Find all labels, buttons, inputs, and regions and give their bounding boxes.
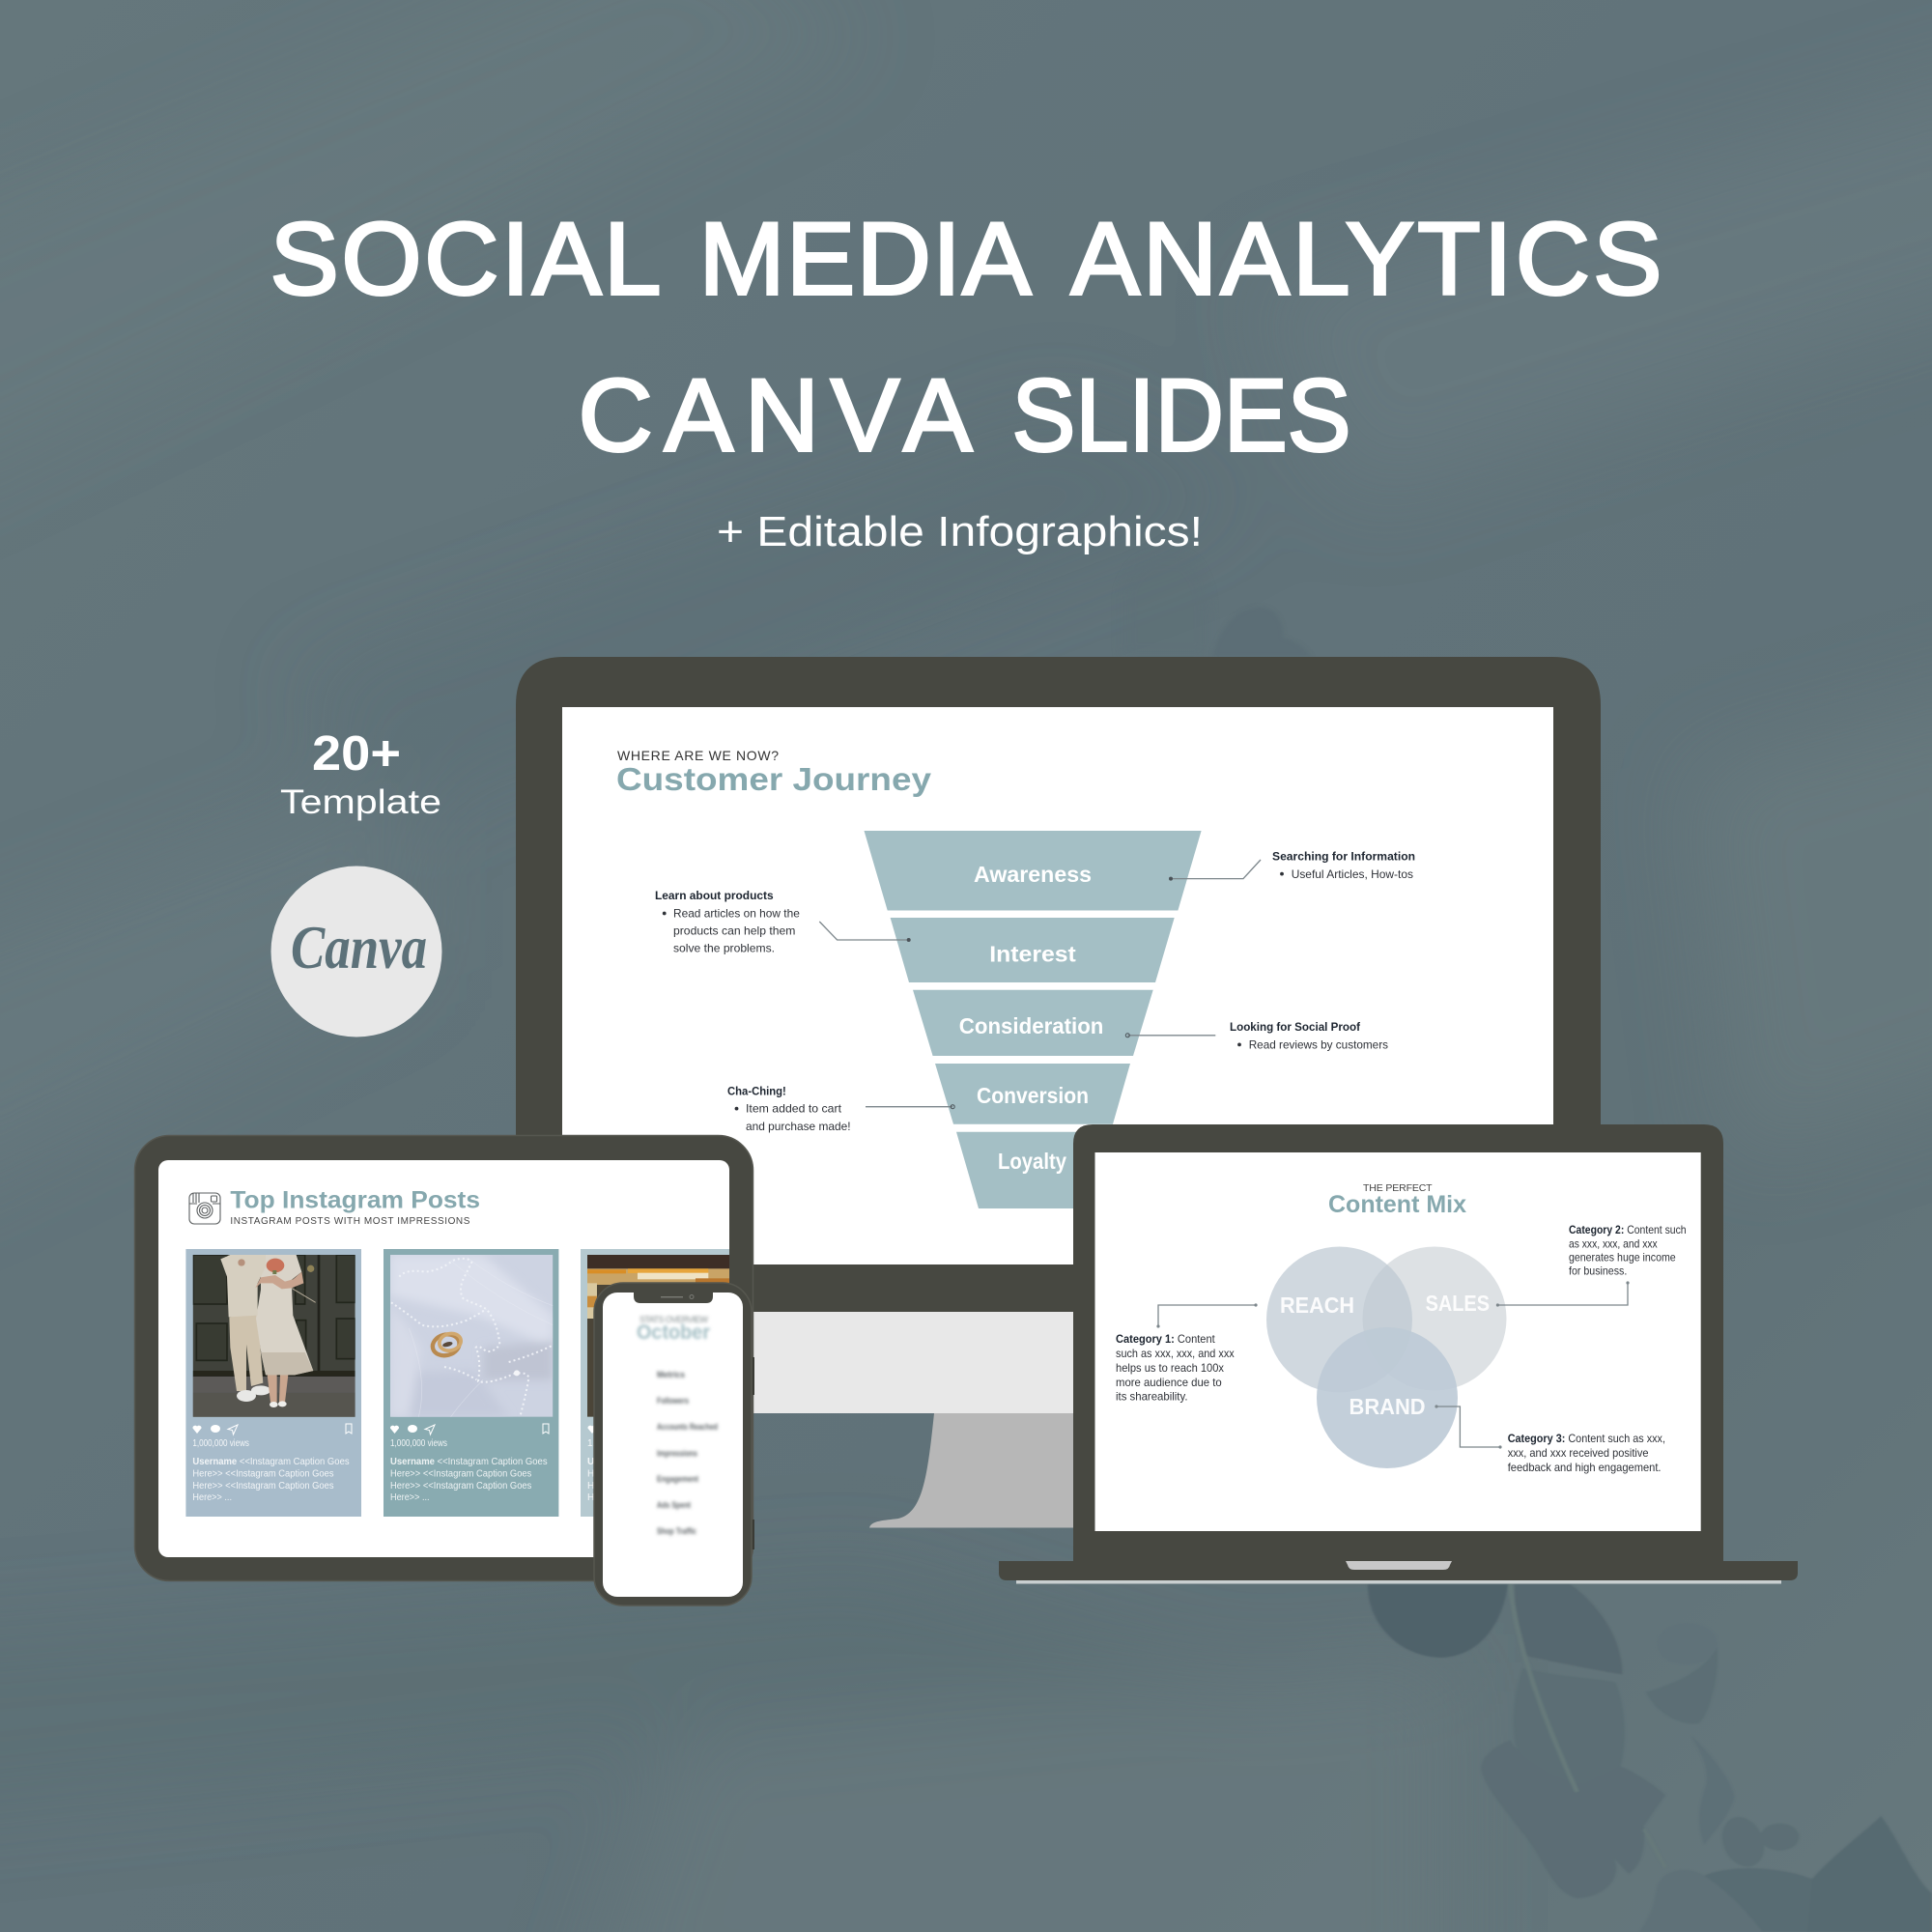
text: category 2: generates huge income bbox=[1569, 1251, 1676, 1264]
post icons bbox=[390, 1424, 549, 1435]
funnel: loyalty bbox=[956, 1132, 1109, 1208]
slide heading: customer journey bbox=[616, 748, 932, 797]
post caption: Username bbox=[587, 1457, 635, 1467]
venn labels: SALES bbox=[1426, 1291, 1490, 1316]
phone buttons bbox=[752, 1357, 754, 1549]
funnel: consideration: Consideration bbox=[959, 1013, 1103, 1038]
funnel: consideration bbox=[913, 990, 1153, 1056]
phone slide: october stats: STATS OVERVIEW bbox=[639, 1315, 709, 1324]
post caption: Here>> <<Instagram Caption Goes bbox=[390, 1468, 531, 1479]
text: category 1: helps us to reach 100x bbox=[1116, 1361, 1224, 1375]
text: category 3 bbox=[1508, 1432, 1665, 1474]
text: category 2: for business. bbox=[1569, 1264, 1627, 1278]
Canva badge bbox=[270, 866, 442, 1037]
text: category 2 bbox=[1569, 1223, 1687, 1278]
text: category 3: Category 3: Content such as xxx, bbox=[1508, 1432, 1665, 1445]
note: learn about products bbox=[655, 889, 911, 955]
title: ANALYTICS bbox=[1070, 201, 1662, 317]
funnel: awareness bbox=[864, 831, 1202, 910]
title: MEDIA bbox=[699, 201, 1032, 317]
leaf shadows bottom right bbox=[1368, 1584, 1932, 1932]
phone notch bbox=[634, 1292, 713, 1303]
text: category 1 bbox=[1116, 1332, 1235, 1403]
text: category 1: such as xxx, xxx, and xxx bbox=[1116, 1347, 1235, 1360]
tablet screen bbox=[158, 1160, 729, 1557]
monitor bbox=[516, 657, 1601, 1528]
connector: category 2 bbox=[1496, 1281, 1630, 1307]
note: learn about products: Learn about products bbox=[655, 889, 774, 902]
monitor screen bbox=[562, 707, 1553, 1264]
phone slide: october stats: Shop Traffic bbox=[657, 1526, 696, 1537]
post caption bbox=[390, 1457, 548, 1503]
connector: category 1 bbox=[1156, 1303, 1258, 1328]
circle: reach bbox=[1266, 1246, 1412, 1393]
photo: sunset bbox=[587, 1255, 730, 1417]
post caption: Here>> bbox=[587, 1468, 620, 1479]
post caption: 1,000,000 views bbox=[587, 1438, 657, 1449]
text: category 1: more audience due to bbox=[1116, 1376, 1222, 1389]
icon: instagram camera bbox=[189, 1193, 220, 1224]
post icons bbox=[192, 1424, 352, 1435]
post caption: Here>> ... bbox=[192, 1492, 232, 1503]
venn diagram bbox=[1266, 1246, 1507, 1468]
funnel: interest: Interest bbox=[989, 941, 1076, 966]
note: cha-ching: and purchase made! bbox=[746, 1120, 851, 1133]
funnel: conversion bbox=[935, 1064, 1130, 1124]
venn labels: BRAND bbox=[1349, 1394, 1426, 1419]
circle: sales bbox=[1362, 1246, 1507, 1391]
decorative leaf shadows above the monitor bbox=[1123, 557, 1312, 657]
phone slide: october stats: Accounts Reached bbox=[657, 1422, 718, 1433]
text: category 2: Category 2: Content such bbox=[1569, 1223, 1687, 1236]
text: category 2: as xxx, xxx, and xxx bbox=[1569, 1237, 1658, 1251]
instagram post card 1 bbox=[185, 1249, 361, 1517]
note: looking for social proof: Read reviews by customers bbox=[1249, 1038, 1388, 1052]
photo: wedding rings on veil bbox=[390, 1255, 553, 1417]
phone body bbox=[594, 1283, 752, 1605]
text: category 3: xxx, and xxx received positive bbox=[1508, 1446, 1649, 1460]
note: searching for information: Searching for Information bbox=[1272, 849, 1415, 863]
funnel: interest bbox=[891, 918, 1175, 982]
phone slide: october stats: October bbox=[637, 1321, 710, 1344]
post caption: Here>> <<Instagram Caption Goes bbox=[192, 1468, 334, 1479]
note: searching for information: Useful Articles, How-tos bbox=[1292, 867, 1413, 881]
funnel: conversion: Conversion bbox=[977, 1083, 1089, 1108]
post caption bbox=[587, 1426, 593, 1500]
note: learn about products: solve the problems. bbox=[673, 942, 775, 955]
phone slide: october stats: Impressions bbox=[657, 1449, 697, 1459]
post caption: Here>> <<Instagram Caption Goes bbox=[192, 1481, 334, 1492]
post caption: Here>> ... bbox=[390, 1492, 430, 1503]
subtitle: + Editable Infographics! bbox=[717, 508, 1203, 555]
tablet frame bbox=[135, 1136, 753, 1580]
instagram post card 3 bbox=[581, 1249, 745, 1517]
instagram post card 2: 1,000,000 views bbox=[390, 1438, 447, 1449]
funnel: awareness: Awareness bbox=[974, 862, 1092, 887]
laptop lid bbox=[1073, 1124, 1723, 1561]
post caption: Username <<Instagram Caption Goes bbox=[390, 1457, 548, 1467]
phone slide: october stats: Followers bbox=[657, 1396, 689, 1406]
laptop bbox=[999, 1124, 1798, 1584]
note: learn about products: Read articles on how the bbox=[673, 906, 800, 920]
connector: category 3 bbox=[1435, 1405, 1502, 1449]
instagram post card 2 bbox=[384, 1249, 558, 1517]
slide heading: customer journey: Customer Journey bbox=[616, 761, 932, 797]
post caption bbox=[192, 1457, 350, 1503]
monitor stand bbox=[580, 1312, 1159, 1528]
phone slide: october stats bbox=[637, 1315, 718, 1537]
phone slide: october stats: Metrics bbox=[657, 1370, 685, 1380]
phone screen bbox=[603, 1293, 743, 1597]
note: learn about products: products can help them bbox=[673, 923, 795, 937]
slide heading: content mix: Content Mix bbox=[1328, 1191, 1466, 1218]
funnel chart bbox=[864, 831, 1202, 1208]
note: looking for social proof bbox=[1125, 1020, 1388, 1052]
note: searching for information bbox=[1169, 849, 1415, 881]
text: category 3: feedback and high engagement. bbox=[1508, 1461, 1662, 1474]
tablet heading: INSTAGRAM POSTS WITH MOST IMPRESSIONS bbox=[230, 1216, 470, 1227]
tablet heading: Top Instagram Posts bbox=[230, 1187, 480, 1214]
text: category 1: its shareability. bbox=[1116, 1389, 1188, 1403]
slide heading: customer journey: WHERE ARE WE NOW? bbox=[617, 748, 779, 763]
template count bbox=[280, 725, 441, 821]
slide heading: content mix: THE PERFECT bbox=[1363, 1182, 1433, 1194]
note: cha-ching: Cha-Ching! bbox=[727, 1084, 786, 1097]
venn labels: REACH bbox=[1280, 1293, 1354, 1318]
funnel: loyalty: Loyalty bbox=[998, 1149, 1066, 1174]
instagram post card 1: 1,000,000 views bbox=[192, 1438, 249, 1449]
template count: Template bbox=[280, 783, 441, 821]
phone bbox=[594, 1283, 754, 1605]
photo: wedding couple bbox=[193, 1255, 355, 1417]
venn labels bbox=[1280, 1291, 1490, 1419]
Canva badge: Canva bbox=[291, 913, 427, 981]
post caption: Here>> <<Instagram Caption Goes bbox=[390, 1481, 531, 1492]
laptop screen bbox=[1095, 1152, 1701, 1531]
title: CANVA bbox=[578, 357, 973, 473]
post caption: Here>> bbox=[587, 1481, 620, 1492]
post caption: Username <<Instagram Caption Goes bbox=[192, 1457, 350, 1467]
title: SOCIAL bbox=[270, 201, 661, 317]
text: category 1: Category 1: Content bbox=[1116, 1332, 1215, 1346]
title: SLIDES bbox=[1012, 357, 1350, 473]
circle: brand bbox=[1317, 1327, 1458, 1468]
laptop base bbox=[999, 1561, 1798, 1584]
template count: 20+ bbox=[312, 725, 401, 781]
note: cha-ching: Item added to cart bbox=[746, 1101, 842, 1115]
note: cha-ching bbox=[727, 1084, 954, 1133]
monitor frame bbox=[516, 657, 1601, 1312]
title bbox=[270, 201, 1662, 473]
phone slide: october stats: Ads Spent bbox=[657, 1500, 692, 1511]
tablet heading bbox=[230, 1187, 480, 1227]
note: looking for social proof: Looking for Social Proof bbox=[1230, 1020, 1361, 1034]
post caption: Here>> bbox=[587, 1492, 620, 1503]
tablet bbox=[135, 1136, 753, 1580]
phone slide: october stats: Engagement bbox=[657, 1474, 699, 1485]
